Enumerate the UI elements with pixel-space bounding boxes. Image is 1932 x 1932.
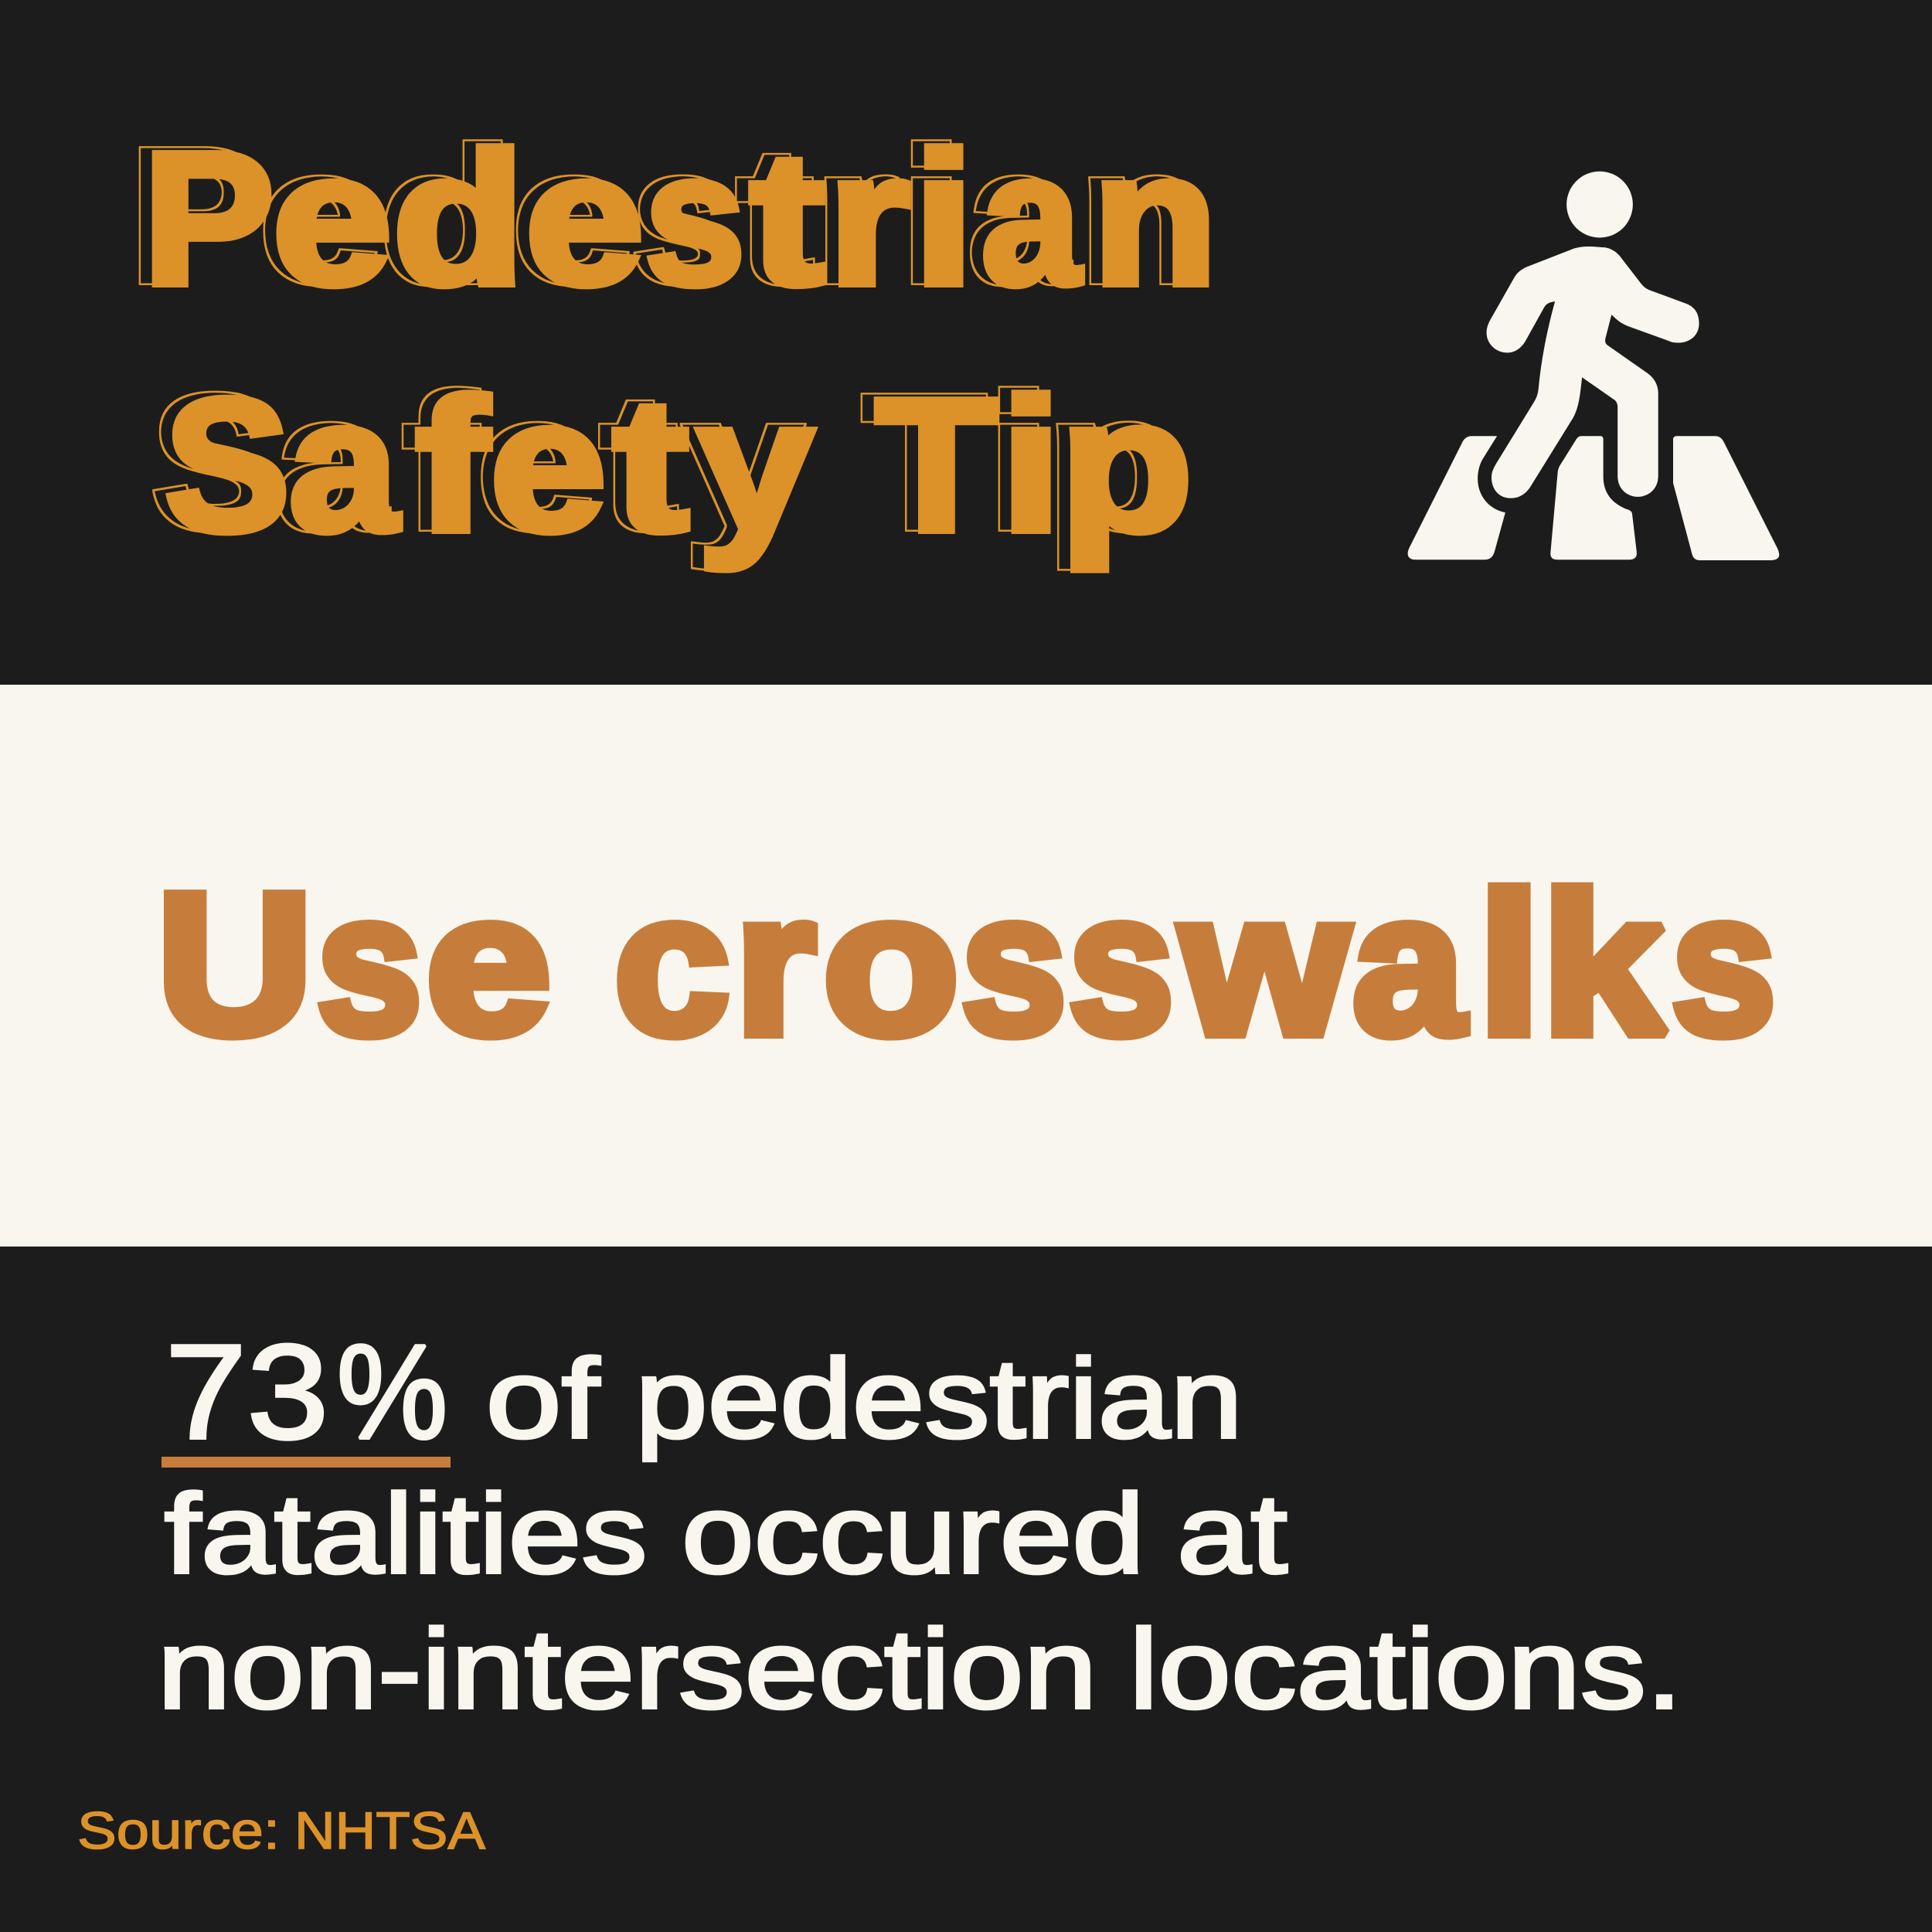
heading: Use crosswalks: e (426, 852, 551, 1077)
heading: Use crosswalks: o (823, 852, 959, 1077)
title outline shadow layer: f (403, 356, 477, 567)
title outline shadow layer: i (901, 110, 962, 321)
title outline shadow layer: s (632, 110, 733, 321)
title outline shadow layer: S (152, 356, 277, 567)
icon: pedestrian on crosswalk (1408, 172, 1779, 560)
icon: right crosswalk stripe (1673, 436, 1779, 560)
heading: Use crosswalks: r (735, 852, 815, 1077)
title outline shadow layer: e (260, 110, 379, 321)
title filled text layer: T (876, 359, 998, 570)
title outline shadow layer: y (685, 356, 801, 567)
title outline shadow layer: T (863, 356, 985, 567)
stat text line 2: occured (682, 1471, 1145, 1597)
panel: cream tip band (0, 685, 1932, 1247)
underline accent for 73% (162, 1457, 451, 1468)
title outline shadow layer: n (1080, 110, 1205, 321)
title outline shadow layer (131, 110, 1205, 567)
title filled text layer: t (613, 359, 689, 570)
title filled text layer: n (1093, 113, 1217, 324)
icon: middle crosswalk stripe (1550, 436, 1637, 560)
source note: Source: (77, 1801, 280, 1860)
stat text line 2: at (1177, 1471, 1287, 1597)
title filled text layer: i (913, 113, 975, 324)
title filled text layer: P (143, 113, 274, 324)
heading: Use crosswalks: U (157, 852, 313, 1077)
title filled text layer: s (645, 113, 745, 324)
heading: Use crosswalks: s (1069, 852, 1174, 1077)
stat number: 73%: 7 (165, 1316, 247, 1467)
heading: Use crosswalks: s (317, 852, 422, 1077)
heading: Use crosswalks: s (1672, 852, 1776, 1077)
title outline shadow layer: P (131, 110, 262, 321)
title filled text layer (143, 113, 1217, 570)
title filled text layer: y (697, 359, 813, 570)
heading: Use crosswalks: w (1178, 852, 1349, 1077)
title outline shadow layer: r (816, 110, 897, 321)
statistic block (158, 1316, 1682, 1732)
title filled text layer: e (526, 113, 644, 324)
title outline shadow layer: p (1047, 356, 1181, 567)
source note: NHTSA (294, 1801, 486, 1860)
heading: Use crosswalks: s (961, 852, 1066, 1077)
title filled text layer: S (165, 359, 290, 570)
heading: Use crosswalks: l (1478, 852, 1540, 1077)
title filled text layer: p (1060, 359, 1193, 570)
heading: Use crosswalks: a (1353, 852, 1465, 1077)
title filled text layer: r (828, 113, 910, 324)
stat text line 1: of (486, 1335, 600, 1461)
title filled text layer: a (981, 113, 1082, 324)
stat text line 3: locations. (1129, 1606, 1682, 1732)
stat number: 73%: 3 (247, 1316, 328, 1467)
stat number: 73%: % (337, 1316, 447, 1467)
icon: head (1566, 172, 1633, 237)
title outline shadow layer: e (513, 110, 631, 321)
title outline shadow layer: i (988, 356, 1049, 567)
stat text line 1: pedestrian (635, 1335, 1243, 1461)
heading: Use crosswalks: k (1542, 852, 1666, 1077)
title outline shadow layer: t (737, 110, 812, 321)
title: Pedestrian Safety Tip (131, 110, 1217, 570)
title outline shadow layer: d (380, 110, 512, 321)
stat text line 3: non-intersection (158, 1606, 1097, 1732)
title filled text layer: t (750, 113, 825, 324)
title outline shadow layer: a (277, 356, 387, 567)
title filled text layer: f (416, 359, 489, 570)
title filled text layer: i (1000, 359, 1062, 570)
heading: Use crosswalks: c (614, 852, 730, 1077)
title filled text layer: d (393, 113, 525, 324)
title outline shadow layer: e (478, 356, 594, 567)
title filled text layer: e (272, 113, 392, 324)
icon: walking body (1487, 247, 1699, 498)
title outline shadow layer: t (600, 356, 676, 567)
stat text line 2: fatalities (165, 1471, 648, 1597)
icon: left crosswalk stripe (1408, 436, 1505, 560)
title outline shadow layer: a (969, 110, 1070, 321)
title filled text layer: e (490, 359, 607, 570)
title filled text layer: a (289, 359, 400, 570)
